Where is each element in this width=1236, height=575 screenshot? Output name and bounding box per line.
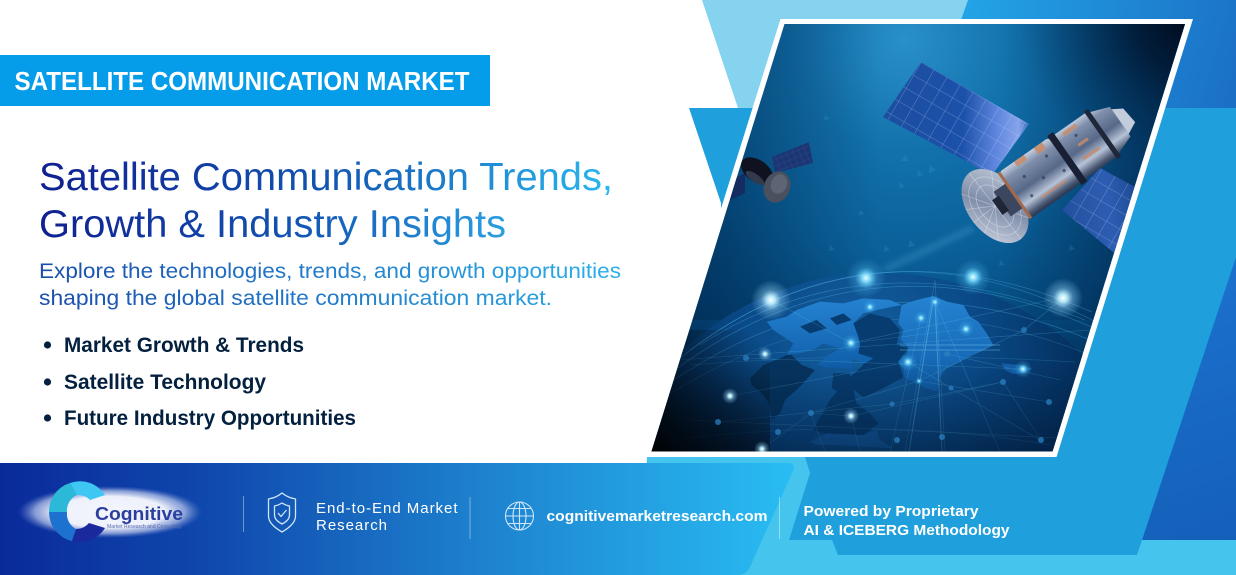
globe <box>652 271 1093 452</box>
particles <box>824 115 1075 266</box>
research text <box>316 500 458 534</box>
dividers <box>244 496 780 539</box>
continents <box>750 296 1032 448</box>
satellite photo <box>652 24 1185 452</box>
icon: shield <box>268 493 296 532</box>
satellite body <box>992 106 1136 220</box>
header banner <box>0 55 490 106</box>
background shape: bottom light band <box>640 457 1236 575</box>
methodology text: AI & ICEBERG Methodology <box>804 523 1010 539</box>
small satellite <box>730 142 813 207</box>
photo frame <box>643 19 1193 457</box>
main heading <box>39 156 613 246</box>
methodology text: Powered by Proprietary <box>804 504 978 520</box>
subtitle: shaping the global satellite communication market. <box>39 286 552 310</box>
logo ring <box>49 481 105 542</box>
large solar panel upper <box>883 62 1029 175</box>
subtitle <box>39 259 621 310</box>
background shape: light blue top wedge <box>702 0 968 108</box>
website: cognitivemarketresearch.com <box>546 508 768 525</box>
logo: Cognitive <box>95 503 183 524</box>
research text: Research <box>316 517 387 534</box>
main heading: Satellite Communication Trends, <box>39 156 613 199</box>
research text: End-to-End Market <box>316 500 458 517</box>
header text: SATELLITE COMMUNICATION MARKET <box>14 68 470 96</box>
network glow nodes <box>715 258 1083 457</box>
network lines <box>678 280 1100 452</box>
background shape: dark blue lower right <box>1142 257 1236 540</box>
methodology text <box>804 504 1010 539</box>
bullet list: Future Industry Opportunities <box>64 407 356 430</box>
background shape: mid blue main panel <box>689 108 1236 555</box>
large solar panel lower <box>1062 168 1135 253</box>
main heading: Growth & Industry Insights <box>39 203 506 246</box>
icon: globe <box>506 502 534 530</box>
bullet list: Market Growth & Trends <box>64 334 304 357</box>
background shape: dark blue top right <box>930 0 1236 108</box>
bullet list <box>44 334 356 430</box>
logo: Market Research and Consulting <box>107 524 181 530</box>
logo <box>18 481 202 542</box>
bullet list: Satellite Technology <box>64 371 266 394</box>
subtitle: Explore the technologies, trends, and growth opportunities <box>39 259 621 283</box>
satellite dish <box>962 169 1028 243</box>
footer bar <box>0 463 794 575</box>
light beam <box>880 225 975 272</box>
